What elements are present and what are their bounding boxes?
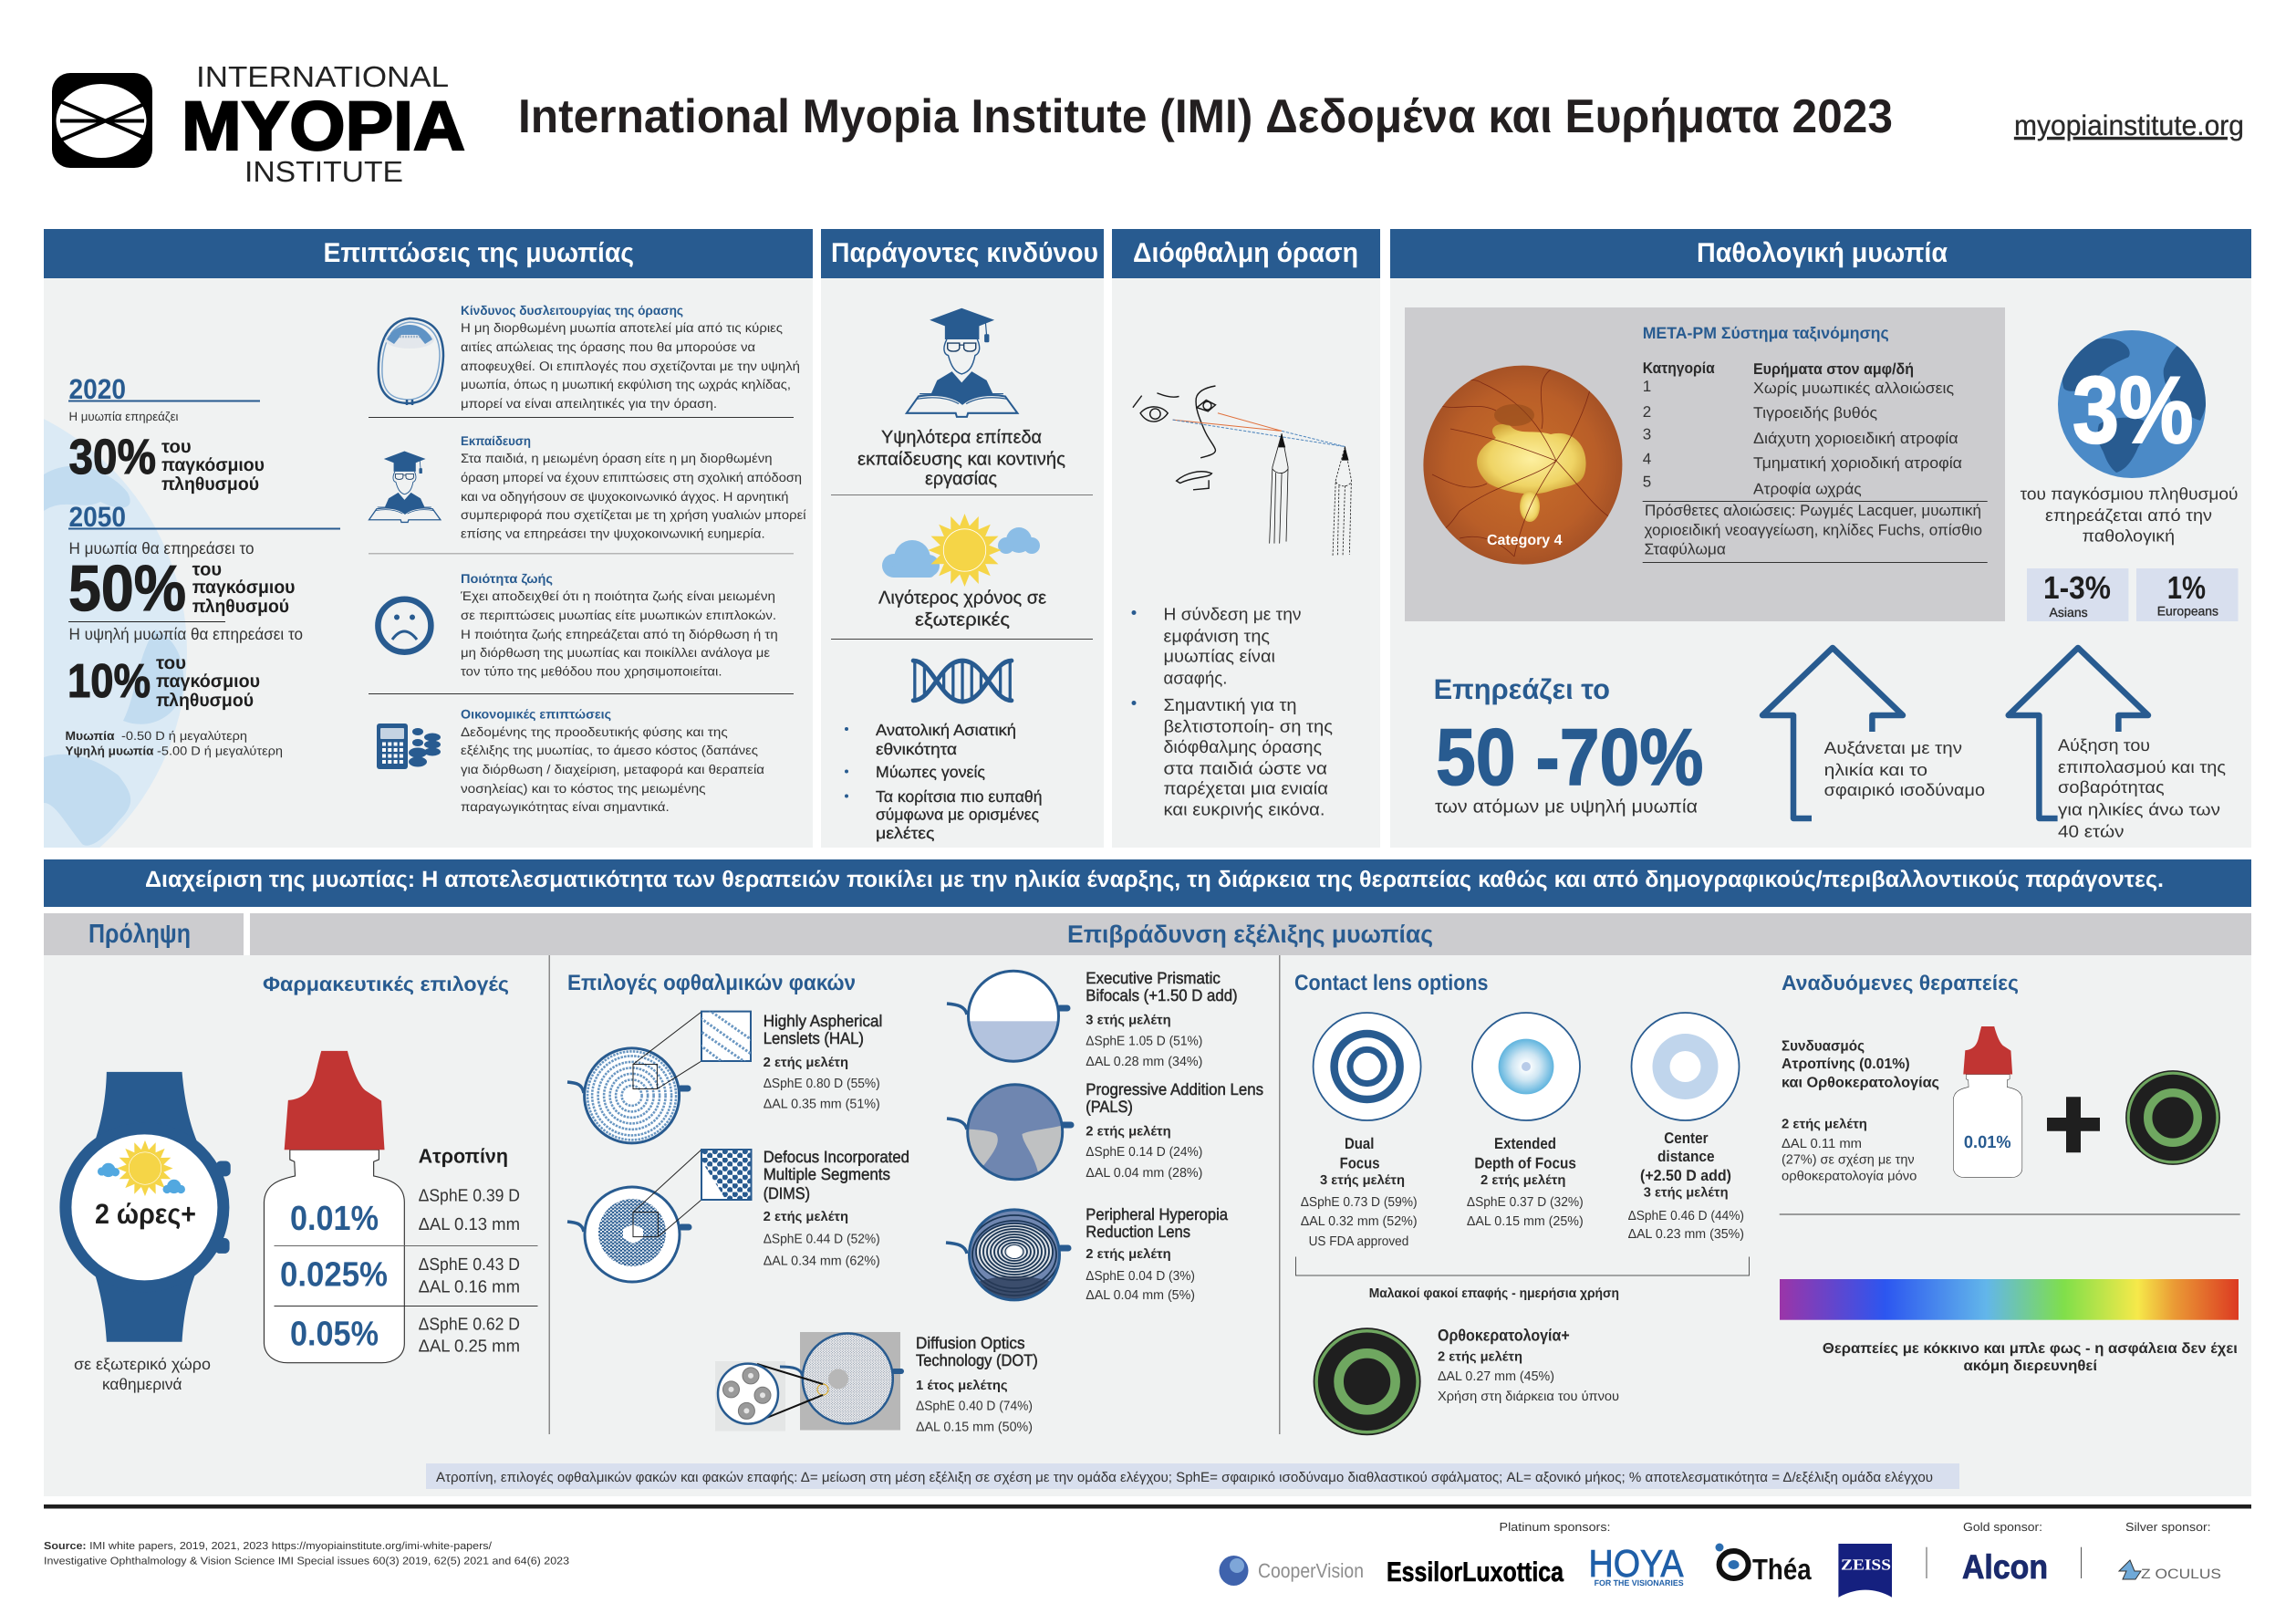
text: atropine doses: 0.025% xyxy=(280,1255,388,1294)
text: quality of life: Η ποιότητα ζωής επηρεάζεται από τη διόρθωση ή τη xyxy=(461,627,778,641)
text: combination therapy: (27%) σε σχέση με την xyxy=(1782,1153,1915,1168)
illustration: eyes and pencils xyxy=(1133,386,1351,557)
text: education: Στα παιδιά, η μειωμένη όραση είτε η μη διορθωμένη xyxy=(461,451,772,465)
icon: sun and clouds xyxy=(882,514,1040,587)
block: myopia definitions: Υψηλή μυωπία xyxy=(66,744,154,757)
text: diffusion optics: Diffusion Optics xyxy=(916,1334,1025,1352)
text: progressive addition: 2 ετής μελέτη xyxy=(1086,1124,1171,1139)
text: extended depth of focus: Extended xyxy=(1494,1135,1556,1152)
arrow: increases with age xyxy=(1762,648,1903,818)
text: combination therapy: ΔAL 0.11 mm xyxy=(1782,1137,1862,1151)
text: outdoors daily: σε εξωτερικό χώρο xyxy=(74,1355,211,1373)
text: 3 percent caption: του παγκόσμιου πληθυσμού xyxy=(2021,484,2239,504)
panel: Risk factors xyxy=(821,229,1104,848)
text: dual focus: Dual xyxy=(1345,1135,1374,1152)
text: extended depth of focus xyxy=(1467,1135,1584,1229)
list: binocular vision notes: εμφάνιση της xyxy=(1164,628,1270,646)
text: HAL xyxy=(764,1012,882,1111)
list: binocular vision notes xyxy=(1131,606,1333,819)
text: quality of life: τον τύπο της μεθόδου που χρησιμοποιείται. xyxy=(461,664,722,679)
text: sources xyxy=(44,1541,569,1567)
text: prevalence increase: Αύξηση του xyxy=(2058,735,2150,755)
stat: 50-70 percent xyxy=(1434,673,1703,817)
globe background xyxy=(44,419,187,848)
heading: slowing progression: Επιβράδυνση εξέλιξης μυωπίας xyxy=(1067,921,1433,948)
text: diffusion optics: ΔSphE 0.40 D (74%) xyxy=(916,1400,1033,1414)
panel: Pathological myopia xyxy=(1390,229,2251,848)
text: combination therapy: Συνδυασμός xyxy=(1782,1039,1865,1055)
block: 2050 statistic xyxy=(68,501,340,711)
table: classification: Χωρίς μυωπικές αλλοιώσεις xyxy=(1753,380,1954,397)
text: atropine results: Ατροπίνη xyxy=(419,1144,508,1168)
text: DIMS: ΔAL 0.34 mm (62%) xyxy=(764,1254,880,1268)
text: diffusion optics: Technology (DOT) xyxy=(916,1351,1038,1369)
logo: ZEISS xyxy=(1838,1544,1892,1598)
text: peripheral hyperopia reduction: 2 ετής μελέτη xyxy=(1086,1247,1171,1262)
panel: pharmaceutical options xyxy=(263,973,538,1363)
text: light therapies: ακόμη διερευνηθεί xyxy=(1963,1359,2097,1374)
text: outdoors daily: καθημερινά xyxy=(102,1375,182,1393)
icon: sad face xyxy=(378,599,431,652)
list: genetic and other factors xyxy=(845,721,1042,842)
text: outdoor time: εξωτερικές xyxy=(915,609,1010,630)
heading: pathological myopia: Παθολογική μυωπία xyxy=(1697,238,1948,268)
text: HAL: 2 ετής μελέτη xyxy=(764,1056,848,1070)
text: combination therapy: ορθοκερατολογία μόνο xyxy=(1782,1169,1917,1183)
text: vision impairment: αιτίες απώλειας της όρασης που θα μπορούσε να xyxy=(461,339,755,354)
icon: outdoor watch: 2 ώρες+ xyxy=(95,1198,196,1230)
text: soft lenses daily wear: Μαλακοί φακοί επαφής - ημερήσια χρήση xyxy=(1369,1286,1619,1301)
logo: Alcon: Alcon xyxy=(1962,1548,2048,1586)
text: atropine results: ΔAL 0.16 mm xyxy=(419,1277,520,1297)
text: outdoors daily xyxy=(74,1355,211,1393)
text: diffusion optics xyxy=(916,1334,1038,1434)
text: sources: Source: IMI white papers, 2019, 2021, 2023 https://myopiainstitute.org/imi-white-papers/ xyxy=(44,1541,493,1552)
text: executive bifocal: ΔSphE 1.05 D (51%) xyxy=(1086,1035,1202,1049)
logo: EssilorLuxottica: EssilorLuxottica xyxy=(1387,1557,1564,1588)
panel: emerging therapies: Αναδυόμενες θεραπείες xyxy=(1782,971,2019,994)
block: myopia definitions: -5.00 D ή μεγαλύτερη xyxy=(157,744,283,757)
text: education: επίσης να επηρεάσει την ψυχοκοινωνική ευημερία. xyxy=(461,526,765,540)
stat: Europeans: Europeans xyxy=(2157,604,2218,619)
text: prevalence increase: επιπολασμού και της xyxy=(2058,757,2226,776)
heading: risk factors: Παράγοντες κινδύνου xyxy=(831,238,1098,268)
text: education: όραση μπορεί να έχουν επιπτώσεις στη σχολική απόδοση xyxy=(461,470,802,484)
stat: 50-70 percent: των ατόμων με υψηλή μυωπία xyxy=(1435,797,1698,817)
logo: International Myopia Institute: INSTITUTE xyxy=(244,155,403,188)
panel: contact lens options: Contact lens options xyxy=(1294,971,1488,995)
stat: Asians: Asians xyxy=(2049,605,2088,619)
lens: peripheral hyperopia reduction xyxy=(946,1204,1068,1305)
block: 2050 statistic: 10% xyxy=(68,655,151,708)
table: classification xyxy=(1643,324,1988,563)
panel: spectacle lens options: Επιλογές οφθαλμικών φακών xyxy=(567,971,856,995)
text: education factor: Υψηλότερα επίπεδα xyxy=(881,427,1042,447)
logo: HOYA: FOR THE VISIONARIES xyxy=(1595,1578,1684,1588)
logo: Oculus xyxy=(2119,1560,2221,1582)
text: economic impact: Οικονομικές επιπτώσεις xyxy=(461,706,611,721)
text: dual focus: 3 ετής μελέτη xyxy=(1320,1173,1405,1188)
text: atropine doses xyxy=(280,1200,388,1354)
block: 2050 statistic: Η υψηλή μυωπία θα επηρεάσει το xyxy=(69,625,303,643)
text: increases with age: ηλικία και το xyxy=(1824,760,1927,779)
panel: META-PM classification xyxy=(1405,307,2005,621)
text: executive bifocal: 3 ετής μελέτη xyxy=(1086,1013,1171,1027)
label: gold sponsor: Gold sponsor: xyxy=(1963,1520,2042,1534)
label: platinum sponsors: Platinum sponsors: xyxy=(1500,1520,1611,1534)
heading: impacts: Επιπτώσεις της μυωπίας xyxy=(323,238,634,268)
list: binocular vision notes: μυωπίας είναι xyxy=(1164,648,1275,666)
text: atropine results: ΔSphE 0.39 D xyxy=(419,1186,520,1206)
text: combination therapy: Ατροπίνης (0.01%) xyxy=(1782,1057,1910,1072)
footnote: abbreviations: Ατροπίνη, επιλογές οφθαλμικών φακών και φακών επαφής: Δ= μείωση στη μέση εξέλιξη σε σχέση με την ομάδα ελέγχου; SphE= σφαιρικό ισοδύναμο διαθλαστικού σφάλματος; AL= αξονικό μήκος; % αποτελεσματικότητα = Δ/εξέλιξη ομάδα ελέγχου xyxy=(436,1470,1933,1485)
text: extended depth of focus: ΔAL 0.15 mm (25%) xyxy=(1467,1214,1584,1229)
heading: slowing progression xyxy=(250,913,2251,955)
panel: pharmaceutical options: Φαρμακευτικές επιλογές xyxy=(263,973,509,995)
icon: globe 3 percent: 3% xyxy=(2073,358,2193,463)
list: genetic and other factors: σύμφωνα με ορισμένες xyxy=(876,805,1039,823)
title: International Myopia Institute (IMI) Δεδομένα και Ευρήματα 2023 xyxy=(518,90,1893,143)
table: classification: χοριοειδική νεοαγγείωση, κηλίδες Fuchs, οπίσθιο xyxy=(1644,522,1982,539)
logo: CooperVision: CooperVision xyxy=(1258,1559,1364,1582)
lens: progressive addition xyxy=(947,1085,1071,1180)
text: orthokeratology xyxy=(1438,1327,1619,1404)
text: peripheral hyperopia reduction: Reduction Lens xyxy=(1086,1223,1190,1241)
lens: dual focus xyxy=(1314,1013,1421,1120)
text: prevalence increase xyxy=(2058,735,2226,841)
text: center distance: 3 ετής μελέτη xyxy=(1644,1186,1729,1201)
panel: emerging therapies xyxy=(1780,971,2240,1374)
table: classification: 2 xyxy=(1643,403,1651,421)
text: prevalence increase: για ηλικίες άνω των xyxy=(2058,799,2220,819)
list: binocular vision notes: και ευκρινής εικόνα. xyxy=(1164,801,1325,819)
text: quality of life: σε περιπτώσεις μυωπίας είτε μυωπικών επιπλοκών. xyxy=(461,608,776,622)
logo: Oculus: Z OCULUS xyxy=(2141,1567,2221,1582)
lens: HAL xyxy=(567,1005,757,1143)
block: 2050 statistic: πληθυσμού xyxy=(192,597,289,617)
table: classification: Τιγροειδής βυθός xyxy=(1753,404,1877,422)
text: economic impact: νοσηλείας) και το κόστος της μειωμένης xyxy=(461,781,706,796)
text: atropine results: ΔAL 0.25 mm xyxy=(419,1338,520,1356)
text: increases with age: σφαιρικό ισοδύναμο xyxy=(1824,780,1985,799)
text: vision impairment: αποφευχθεί. Οι επιπλογές που σχετίζονται με την υψηλή xyxy=(461,359,800,373)
stat: 50-70 percent: 50 -70% xyxy=(1436,712,1703,802)
lower panel background xyxy=(44,955,2251,1496)
text: DIMS: (DIMS) xyxy=(764,1184,810,1202)
sponsors xyxy=(1219,1520,2221,1598)
text: center distance: Center xyxy=(1664,1130,1709,1147)
stat: Europeans: 1% xyxy=(2167,570,2206,606)
heading: prevention: Πρόληψη xyxy=(88,920,191,949)
text: increases with age xyxy=(1824,738,1985,799)
table: classification: 1 xyxy=(1643,378,1651,395)
text: dual focus: US FDA approved xyxy=(1309,1234,1408,1249)
block: 2050 statistic: του xyxy=(192,560,222,580)
text: vision impairment xyxy=(461,303,800,411)
text: education xyxy=(461,433,806,540)
text: DIMS: Multiple Segments xyxy=(764,1165,890,1183)
text: peripheral hyperopia reduction: ΔAL 0.04 mm (5%) xyxy=(1086,1288,1195,1303)
text: 3 percent caption: παθολογική xyxy=(2083,526,2175,546)
text: prevalence increase: σοβαρότητας xyxy=(2058,777,2165,796)
block: myopia definitions: -0.50 D ή μεγαλύτερη xyxy=(121,729,247,743)
image: retinal fundus: Category 4 xyxy=(1487,533,1563,548)
text: 3 percent caption: επηρεάζεται από την xyxy=(2045,505,2212,525)
list: binocular vision notes: παρέχεται μια ενιαία xyxy=(1164,779,1328,799)
text: extended depth of focus: Depth of Focus xyxy=(1474,1155,1576,1171)
text: center distance: ΔAL 0.23 mm (35%) xyxy=(1628,1227,1744,1242)
text: education factor xyxy=(857,427,1065,489)
gradient: red and blue light therapy xyxy=(1780,1279,2239,1320)
text: peripheral hyperopia reduction: ΔSphE 0.04 D (3%) xyxy=(1086,1269,1195,1284)
text: atropine results: ΔAL 0.13 mm xyxy=(419,1215,520,1234)
list: genetic and other factors: μελέτες xyxy=(876,824,934,842)
text: progressive addition: (PALS) xyxy=(1086,1098,1133,1116)
table: classification: 4 xyxy=(1643,451,1651,467)
table: classification: Διάχυτη χοριοειδική ατροφία xyxy=(1753,430,1958,447)
text: outdoor time xyxy=(878,588,1046,630)
text: DIMS: 2 ετής μελέτη xyxy=(764,1210,848,1224)
text: vision impairment: Κίνδυνος δυσλειτουργίας της όρασης xyxy=(461,303,683,318)
text: economic impact: Δεδομένης της προοδευτικής φύσης και της xyxy=(461,724,728,739)
text: education factor: εκπαίδευσης και κοντινής xyxy=(857,449,1065,469)
table: classification: Πρόσθετες αλοιώσεις: Ρωγμές Lacquer, μυωπική xyxy=(1645,502,1981,519)
text: peripheral hyperopia reduction xyxy=(1086,1205,1229,1303)
text: education factor: εργασίας xyxy=(925,469,997,489)
arrow: prevalence increase xyxy=(2009,648,2148,818)
block: 2020 statistic: 30% xyxy=(69,430,156,484)
icon: orthokeratology lens xyxy=(2125,1070,2220,1165)
text: vision impairment: μυωπία, όπως η μυωπική εκφύλιση της ωχράς κηλίδας, xyxy=(461,377,791,391)
lens: executive bifocal xyxy=(947,971,1067,1065)
footnote: abbreviations xyxy=(426,1463,1959,1489)
logo: ZEISS: ZEISS xyxy=(1841,1556,1891,1574)
text: increases with age: Αυξάνεται με την xyxy=(1824,738,1962,757)
banner: myopia management xyxy=(44,859,2251,907)
table: classification: Τμηματική χοριοδική ατροφία xyxy=(1753,454,1962,472)
text: quality of life: μη διόρθωση της μυωπίας και ποικίλλει ανάλογα με xyxy=(461,645,770,660)
text: orthokeratology: Χρήση στη διάρκεια του ύπνου xyxy=(1438,1390,1619,1404)
logo: HOYA: HOYA xyxy=(1589,1542,1684,1585)
text: dual focus: ΔSphE 0.73 D (59%) xyxy=(1301,1195,1418,1210)
text: education: και να οδηγήσουν σε ψυχοκοινωνικό άγχος. Η αρνητική xyxy=(461,489,788,504)
text: center distance xyxy=(1628,1130,1744,1242)
text: atropine results xyxy=(419,1144,520,1356)
text: combination therapy: και Ορθοκερατολογίας xyxy=(1782,1076,1939,1091)
text: atropine doses: 0.01% xyxy=(290,1200,379,1238)
panel: Binocular vision xyxy=(1112,229,1380,848)
text: DIMS xyxy=(764,1148,909,1268)
panel: Impacts of myopia xyxy=(44,229,813,848)
lens: DIMS xyxy=(567,1150,752,1282)
text: dual focus: Focus xyxy=(1340,1155,1379,1171)
text: orthokeratology: 2 ετής μελέτη xyxy=(1438,1350,1522,1365)
text: center distance: distance xyxy=(1657,1148,1715,1165)
icon: small atropine bottle xyxy=(1953,1026,2022,1178)
block: 2020 statistic: παγκόσμιου xyxy=(161,455,265,475)
text: dual focus xyxy=(1301,1135,1418,1249)
block: 2050 statistic: 2050 xyxy=(69,501,126,533)
text: quality of life: Ποιότητα ζωής xyxy=(461,571,553,586)
text: executive bifocal: ΔAL 0.28 mm (34%) xyxy=(1086,1055,1202,1069)
logo: Thea xyxy=(1715,1544,1812,1586)
list: binocular vision notes: Σημαντική για τη xyxy=(1164,696,1297,715)
text: education: Εκπαίδευση xyxy=(461,433,531,448)
icon: eye cross-section xyxy=(379,318,443,405)
list: binocular vision notes: στα παιδιά ώστε να xyxy=(1164,759,1327,779)
block: 2050 statistic: παγκόσμιου xyxy=(192,578,296,598)
stat: Europeans xyxy=(2136,568,2239,621)
text: HAL: Lenslets (HAL) xyxy=(764,1029,864,1047)
text: DIMS: Defocus Incorporated xyxy=(764,1148,909,1166)
icon: outdoor watch xyxy=(59,1072,231,1342)
lens: center distance xyxy=(1631,1013,1739,1120)
block: 2050 statistic: παγκόσμιου xyxy=(156,671,260,692)
logo: CooperVision xyxy=(1219,1556,1364,1586)
text: quality of life: Έχει αποδειχθεί ότι η ποιότητα ζωής είναι μειωμένη xyxy=(460,588,775,603)
list: binocular vision notes: Η σύνδεση με την xyxy=(1164,606,1301,624)
block: 2020 statistic xyxy=(68,373,265,494)
text: outdoor time: Λιγότερος χρόνος σε xyxy=(878,588,1046,608)
image: retinal fundus xyxy=(1423,366,1622,565)
text: progressive addition: Progressive Addition Lens xyxy=(1086,1080,1263,1098)
list: genetic and other factors: Μύωπες γονείς xyxy=(876,763,985,781)
heading: binocular vision: Διόφθαλμη όραση xyxy=(1133,238,1358,268)
block: 2050 statistic: Η μυωπία θα επηρεάσει το xyxy=(69,539,254,557)
icon: globe 3 percent xyxy=(2058,330,2208,478)
text: orthokeratology: Ορθοκερατολογία+ xyxy=(1438,1327,1570,1345)
text: quality of life xyxy=(460,571,778,679)
table: classification: 5 xyxy=(1643,473,1651,491)
banner: myopia management: Διαχείριση της μυωπίας: Η αποτελεσματικότητα των θεραπειών ποικίλει με την ηλικία έναρξης, τη διάρκεια της θεραπείας καθώς και από δημογραφικούς/περιβαλλοντικούς παράγοντες. xyxy=(145,867,2164,892)
list: binocular vision notes: βελτιστοποίη- ση της xyxy=(1164,717,1333,737)
list: genetic and other factors: εθνικότητα xyxy=(876,740,957,758)
table: classification: Σταφύλωμα xyxy=(1644,541,1726,558)
text: DIMS: ΔSphE 0.44 D (52%) xyxy=(764,1232,880,1246)
block: myopia definitions xyxy=(66,729,283,757)
block: myopia definitions: Μυωπία xyxy=(66,729,115,743)
text: center distance: (+2.50 D add) xyxy=(1640,1167,1731,1184)
text: economic impact xyxy=(461,706,764,814)
text: light therapies: Θεραπείες με κόκκινο και μπλε φως - η ασφάλεια δεν έχει xyxy=(1823,1341,2238,1357)
stat: 50-70 percent: Επηρεάζει το xyxy=(1434,673,1610,705)
lens: orthokeratology xyxy=(1314,1327,1421,1435)
list: binocular vision notes: διόφθαλμης όρασης xyxy=(1164,738,1322,757)
text: HAL: ΔSphE 0.80 D (55%) xyxy=(764,1077,880,1091)
block: 2020 statistic: πληθυσμού xyxy=(161,474,259,494)
panel: contact lens options xyxy=(1294,971,1750,1435)
text: prevalence increase: 40 ετών xyxy=(2058,821,2124,841)
list: genetic and other factors: Ανατολική Ασιατική xyxy=(876,721,1016,739)
list: binocular vision notes: ασαφής. xyxy=(1164,670,1228,688)
text: progressive addition: ΔSphE 0.14 D (24%) xyxy=(1086,1145,1202,1160)
text: atropine results: ΔSphE 0.43 D xyxy=(419,1255,520,1275)
text: economic impact: παραγωγικότητας είναι σημαντικά. xyxy=(461,799,670,814)
table: classification: Ευρήματα στον αμφ/δή xyxy=(1753,360,1914,378)
lens: diffusion optics xyxy=(715,1332,901,1431)
text: diffusion optics: ΔAL 0.15 mm (50%) xyxy=(916,1420,1033,1434)
stat: Asians xyxy=(2027,568,2128,621)
text: vision impairment: Η μη διορθωμένη μυωπία αποτελεί μία από τις κύριες xyxy=(461,320,783,335)
list: genetic and other factors: Τα κορίτσια πιο ευπαθή xyxy=(876,787,1042,806)
text: executive bifocal: Executive Prismatic xyxy=(1086,969,1221,987)
text: center distance: ΔSphE 0.46 D (44%) xyxy=(1628,1209,1744,1223)
bracket: soft lenses xyxy=(1295,1257,1750,1275)
text: atropine doses: 0.05% xyxy=(290,1316,379,1354)
block: 2050 statistic: πληθυσμού xyxy=(156,691,254,711)
lens: extended depth of focus xyxy=(1472,1013,1580,1120)
text: HAL: ΔAL 0.35 mm (51%) xyxy=(764,1097,880,1111)
text: combination therapy xyxy=(1782,1039,1939,1183)
label: silver sponsor: Silver sponsor: xyxy=(2125,1520,2211,1534)
stat: Asians: 1-3% xyxy=(2043,570,2111,606)
text: dual focus: ΔAL 0.32 mm (52%) xyxy=(1301,1214,1418,1229)
text: progressive addition xyxy=(1086,1080,1263,1181)
text: progressive addition: ΔAL 0.04 mm (28%) xyxy=(1086,1166,1202,1181)
text: 3 percent caption xyxy=(2021,484,2239,546)
text: education: συμπεριφορά που σχετίζεται με τη χρήση γυαλιών μπορεί xyxy=(461,507,806,522)
logo: International Myopia Institute: MYOPIA xyxy=(182,88,465,165)
text: economic impact: εξέλιξης της μυωπίας, το άμεσο κόστος (δαπάνες xyxy=(461,743,758,757)
logo: Thea: Théa xyxy=(1752,1553,1812,1586)
text: combination therapy: 2 ετής μελέτη xyxy=(1782,1118,1867,1132)
text: economic impact: για διόρθωση / διαχείριση, μεταφορά και θεραπεία xyxy=(461,762,764,776)
icon: DNA xyxy=(913,661,1012,702)
text: diffusion optics: 1 έτος μελέτης xyxy=(916,1379,1008,1393)
icon: small atropine bottle: 0.01% xyxy=(1964,1133,2011,1152)
icon: graduate with book xyxy=(369,451,441,522)
block: 2020 statistic: 2020 xyxy=(69,373,126,405)
icon: plus sign xyxy=(2047,1097,2100,1152)
logo: International Myopia Institute: INTERNATIONAL xyxy=(196,60,449,93)
text: sources: Investigative Ophthalmology & Vision Science IMI Special issues 60(3) 2019, 62(5) 2021 and 64(6) 2023 xyxy=(44,1556,569,1567)
icon: atropine bottle xyxy=(264,1051,404,1363)
text: executive bifocal: Bifocals (+1.50 D add) xyxy=(1086,986,1238,1005)
icon: calculator and coins xyxy=(377,724,441,769)
text: atropine results: ΔSphE 0.62 D xyxy=(419,1316,520,1334)
table: classification: 3 xyxy=(1643,425,1651,443)
logo: International Myopia Institute xyxy=(52,60,465,188)
text: extended depth of focus: 2 ετής μελέτη xyxy=(1480,1173,1565,1188)
text: light therapies xyxy=(1823,1341,2238,1374)
table: classification: META-PM Σύστημα ταξινόμησης xyxy=(1643,324,1889,342)
table: classification: Κατηγορία xyxy=(1643,359,1715,377)
panel: spectacle lens options xyxy=(567,969,1263,1434)
text: peripheral hyperopia reduction: Peripheral Hyperopia xyxy=(1086,1205,1229,1223)
text: vision impairment: μπορεί να είναι απειλητικές για την όραση. xyxy=(461,396,717,411)
text: executive bifocal xyxy=(1086,969,1238,1069)
text: orthokeratology: ΔAL 0.27 mm (45%) xyxy=(1438,1369,1554,1384)
block: 2050 statistic: 50% xyxy=(68,553,186,625)
text: HAL: Highly Aspherical xyxy=(764,1012,882,1030)
website link: myopiainstitute.org xyxy=(2014,109,2244,141)
heading: prevention xyxy=(44,913,244,955)
icon: graduate reading xyxy=(907,308,1017,417)
table: classification: Ατροφία ωχράς xyxy=(1753,480,1862,498)
block: 2020 statistic: Η μυωπία επηρεάζει xyxy=(69,410,179,423)
block: 2020 statistic: του xyxy=(161,437,192,457)
block: 2050 statistic: του xyxy=(156,653,186,673)
text: extended depth of focus: ΔSphE 0.37 D (32%) xyxy=(1467,1195,1584,1210)
